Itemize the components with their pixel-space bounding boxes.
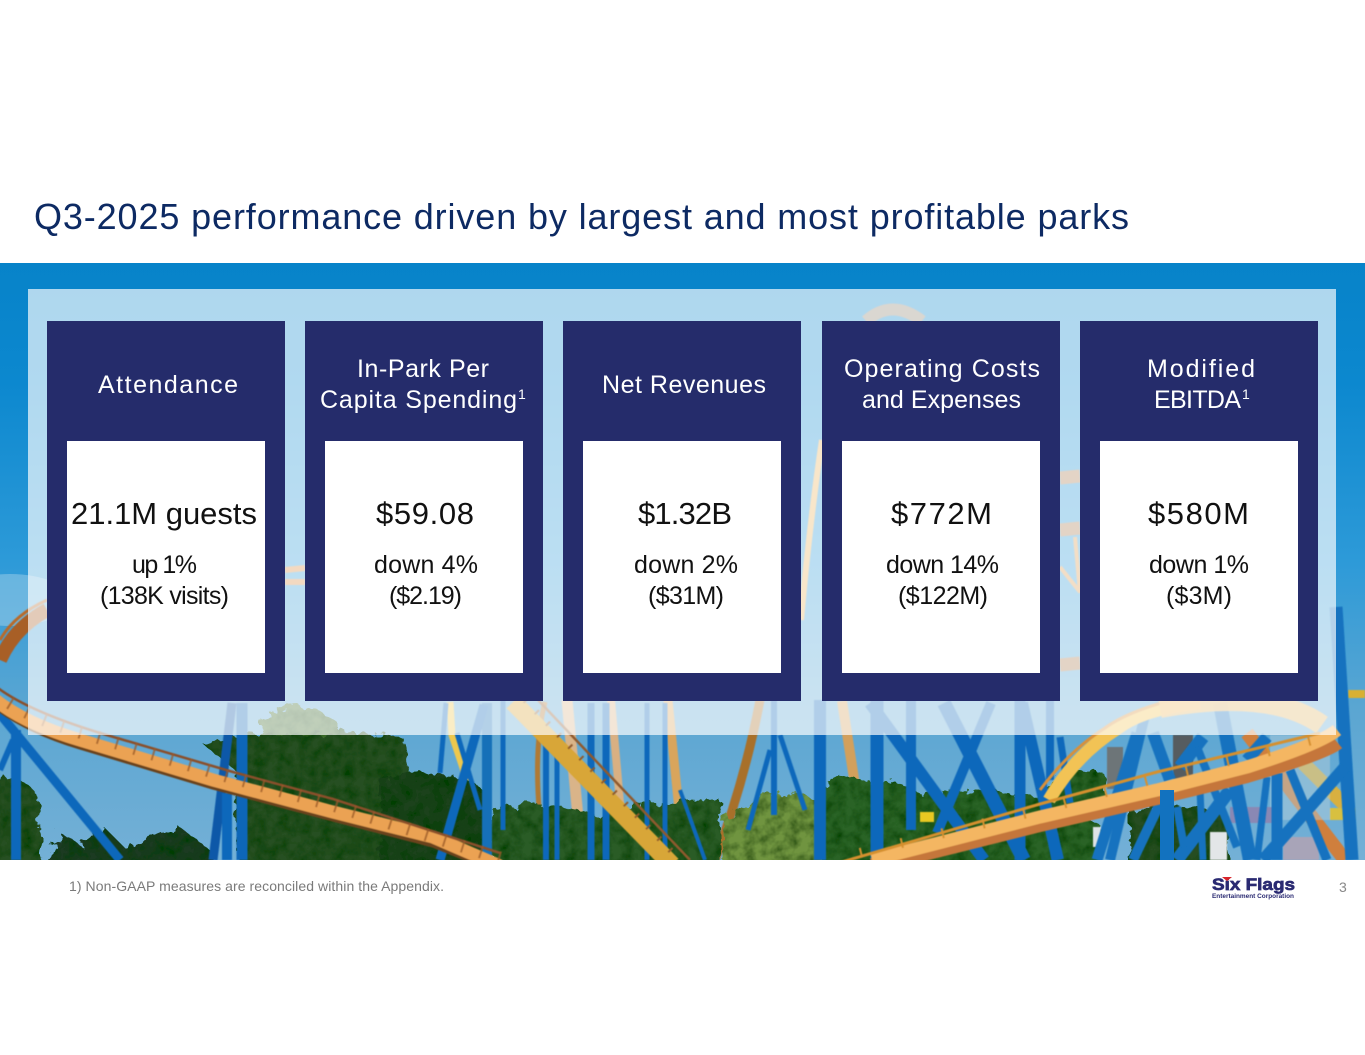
panel: attendance bbox=[47, 321, 285, 701]
panel: in-park per capita spending bbox=[305, 321, 543, 701]
far tracks bbox=[0, 310, 1345, 860]
change: attendance bbox=[100, 551, 229, 610]
heading: in-park per capita spending: 1 bbox=[518, 386, 526, 402]
heading: modified ebitda bbox=[1147, 355, 1255, 414]
logo: Six Flags: Six Flags bbox=[1212, 875, 1295, 894]
value: attendance: 21.1M guests bbox=[71, 496, 257, 531]
change: net revenues: ($31M) bbox=[648, 582, 724, 610]
left coaster track bbox=[0, 685, 500, 870]
heading: operating costs and expenses: Operating Costs bbox=[844, 355, 1040, 383]
blue pier in front of track bbox=[1160, 790, 1174, 860]
heading: operating costs and expenses bbox=[844, 355, 1040, 414]
change: net revenues: down 2% bbox=[634, 551, 738, 579]
change: spending: ($2.19) bbox=[389, 582, 462, 610]
translucent white overlay panel bbox=[28, 289, 1336, 735]
value: ebitda: $580M bbox=[1148, 496, 1249, 531]
change: spending: down 4% bbox=[374, 551, 478, 579]
change: attendance: up 1% bbox=[132, 551, 197, 579]
panel: modified ebitda bbox=[1080, 321, 1318, 701]
background photo: roller coaster bbox=[0, 263, 1365, 900]
value: spending: $59.08 bbox=[376, 496, 474, 531]
title: Q3-2025 performance driven by largest and most profitable parks bbox=[34, 196, 1129, 237]
change: net revenues bbox=[634, 551, 738, 610]
heading: in-park per capita spending: In-Park Per bbox=[357, 355, 489, 383]
change: attendance: (138K visits) bbox=[100, 582, 229, 610]
blue supports bbox=[0, 607, 1352, 860]
center diagonal track bbox=[513, 700, 690, 865]
value: operating costs: $772M bbox=[891, 496, 992, 531]
change: ebitda: down 1% bbox=[1149, 551, 1249, 579]
page number: 3 bbox=[1339, 879, 1347, 895]
heading: modified ebitda: 1 bbox=[1242, 386, 1250, 402]
heading: operating costs and expenses: and Expenses bbox=[862, 386, 1021, 414]
upper yellow track bbox=[1040, 698, 1322, 800]
footnote: 1) Non-GAAP measures are reconciled within the Appendix. bbox=[69, 878, 444, 894]
right front track bbox=[835, 730, 1337, 866]
change: ebitda: ($3M) bbox=[1166, 582, 1232, 610]
heading: in-park per capita spending: Capita Spending bbox=[320, 386, 517, 414]
panel: operating costs and expenses bbox=[822, 321, 1060, 701]
heading: modified ebitda: Modified bbox=[1147, 355, 1255, 383]
logo: Six Flags: Entertainment Corporation bbox=[1212, 894, 1294, 900]
value: net revenues: $1.32B bbox=[638, 496, 732, 531]
change: operating costs: ($122M) bbox=[898, 582, 988, 610]
change: spending bbox=[374, 551, 478, 610]
heading: modified ebitda: EBITDA bbox=[1154, 386, 1241, 414]
trees bbox=[0, 703, 1230, 860]
heading: net revenues: Net Revenues bbox=[602, 371, 766, 399]
panel: net revenues bbox=[563, 321, 801, 701]
heading: in-park per capita spending bbox=[320, 355, 526, 414]
heading: attendance: Attendance bbox=[98, 371, 238, 399]
buildings and lattice bbox=[920, 690, 1365, 860]
change: operating costs bbox=[886, 551, 999, 610]
change: operating costs: down 14% bbox=[886, 551, 999, 579]
change: ebitda bbox=[1149, 551, 1249, 610]
logo: Six Flags bbox=[1212, 875, 1295, 900]
